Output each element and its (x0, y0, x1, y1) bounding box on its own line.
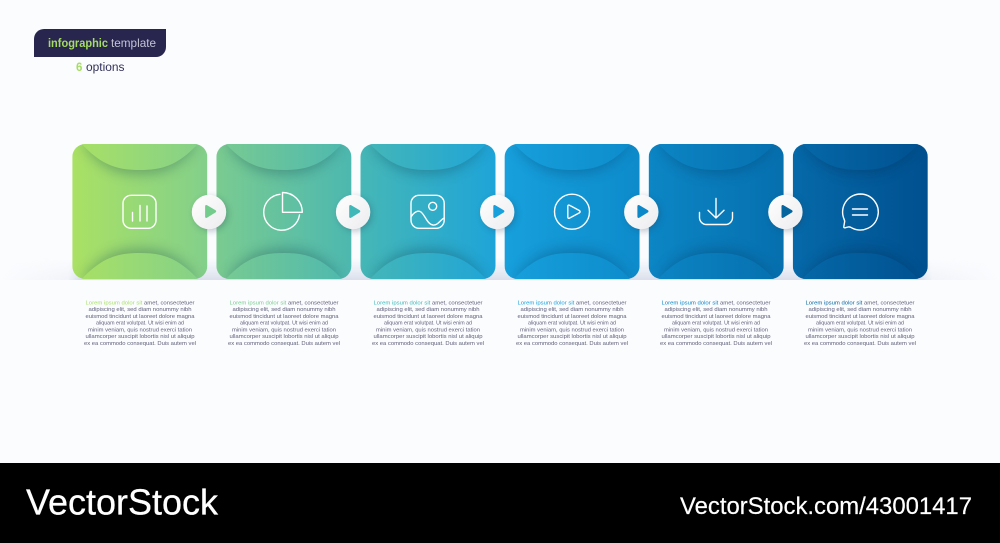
text block 6: adipiscing elit, sed diam nonummy nibh (808, 307, 912, 313)
icon: image (411, 195, 444, 228)
text block 5: Lorem ipsum dolor sit amet, consectetuer (662, 300, 771, 306)
text block 3: ex ea commodo consequat. Duis autem vel (372, 341, 484, 347)
arrow button 4 (624, 195, 660, 231)
text block 6 (804, 300, 916, 347)
text block 1: aliquam erat volutpat. Ut wisi enim ad (96, 321, 184, 327)
footer logo: VectorStock: VectorStock (26, 482, 219, 522)
icon: pie chart (264, 192, 302, 230)
icon: chat bubble (843, 194, 878, 230)
text block 3: Lorem ipsum dolor sit amet, consectetuer (374, 300, 483, 306)
text block 4: ullamcorper suscipit lobortis nisl ut aliquip (518, 334, 626, 340)
text block 1: Lorem ipsum dolor sit amet, consectetuer (86, 300, 195, 306)
text block 6: Lorem ipsum dolor sit amet, consectetuer (806, 300, 915, 306)
text block 3: adipiscing elit, sed diam nonummy nibh (376, 307, 480, 313)
panel 4: light blue card (505, 141, 640, 282)
subtitle: 6 options: 6 (76, 62, 82, 74)
text block 1: minim veniam, quis nostrud exerci tation (88, 328, 192, 334)
text block 1: ex ea commodo consequat. Duis autem vel (84, 341, 196, 347)
text block 6: minim veniam, quis nostrud exerci tation (808, 328, 912, 334)
text block 4: euismod tincidunt ut laoreet dolore magna (518, 314, 627, 320)
arrow button 3 (480, 195, 516, 231)
arrow button 2 (336, 195, 372, 231)
header: infographic template tag: infographic (48, 36, 108, 50)
text block 6: aliquam erat volutpat. Ut wisi enim ad (816, 321, 904, 327)
text block 1: adipiscing elit, sed diam nonummy nibh (88, 307, 192, 313)
icon: bar chart (123, 195, 156, 228)
text block 5: minim veniam, quis nostrud exerci tation (664, 328, 768, 334)
text block 4: aliquam erat volutpat. Ut wisi enim ad (528, 321, 616, 327)
text block 2: minim veniam, quis nostrud exerci tation (232, 328, 336, 334)
subtitle: 6 options: options (86, 62, 125, 74)
text block 4: Lorem ipsum dolor sit amet, consectetuer (518, 300, 627, 306)
text block 1 (84, 300, 196, 347)
footer link: image id: VectorStock.com/43001417 (680, 493, 972, 520)
header: infographic template tag: template (111, 36, 156, 50)
footer bar (0, 463, 1000, 543)
arrow button 5 (768, 195, 804, 231)
text block 5: euismod tincidunt ut laoreet dolore magna (662, 314, 771, 320)
panel 6: dark blue card (793, 141, 928, 282)
text block 4: adipiscing elit, sed diam nonummy nibh (520, 307, 624, 313)
text block 5: aliquam erat volutpat. Ut wisi enim ad (672, 321, 760, 327)
text block 6: ullamcorper suscipit lobortis nisl ut aliquip (806, 334, 914, 340)
text block 2: euismod tincidunt ut laoreet dolore magna (230, 314, 339, 320)
text block 1: ullamcorper suscipit lobortis nisl ut aliquip (86, 334, 194, 340)
panel 5: blue card (649, 141, 784, 282)
text block 5 (660, 300, 772, 347)
header: infographic template tag (34, 29, 166, 57)
text block 4 (516, 300, 628, 347)
icon: play circle (554, 194, 590, 229)
text block 2 (228, 300, 340, 347)
icon: download (700, 198, 732, 224)
panel 2: green-teal card (216, 141, 351, 282)
text block 3: aliquam erat volutpat. Ut wisi enim ad (384, 321, 472, 327)
panel 3: teal card (360, 141, 496, 282)
text block 2: aliquam erat volutpat. Ut wisi enim ad (240, 321, 328, 327)
arrow button 1 (192, 195, 228, 231)
text block 3: euismod tincidunt ut laoreet dolore magna (374, 314, 483, 320)
text block 4: minim veniam, quis nostrud exerci tation (520, 328, 624, 334)
text block 2: Lorem ipsum dolor sit amet, consectetuer (230, 300, 339, 306)
panel 1: green card (72, 141, 207, 282)
text block 5: ex ea commodo consequat. Duis autem vel (660, 341, 772, 347)
text block 2: adipiscing elit, sed diam nonummy nibh (232, 307, 336, 313)
text block 2: ex ea commodo consequat. Duis autem vel (228, 341, 340, 347)
text block 1: euismod tincidunt ut laoreet dolore magna (86, 314, 195, 320)
text block 3 (372, 300, 484, 347)
text block 6: euismod tincidunt ut laoreet dolore magna (806, 314, 915, 320)
text block 6: ex ea commodo consequat. Duis autem vel (804, 341, 916, 347)
text block 2: ullamcorper suscipit lobortis nisl ut aliquip (230, 334, 338, 340)
ground shadow (64, 264, 936, 280)
text block 5: ullamcorper suscipit lobortis nisl ut aliquip (662, 334, 770, 340)
text block 3: ullamcorper suscipit lobortis nisl ut aliquip (374, 334, 482, 340)
text block 5: adipiscing elit, sed diam nonummy nibh (664, 307, 768, 313)
text block 4: ex ea commodo consequat. Duis autem vel (516, 341, 628, 347)
text block 3: minim veniam, quis nostrud exerci tation (376, 328, 480, 334)
